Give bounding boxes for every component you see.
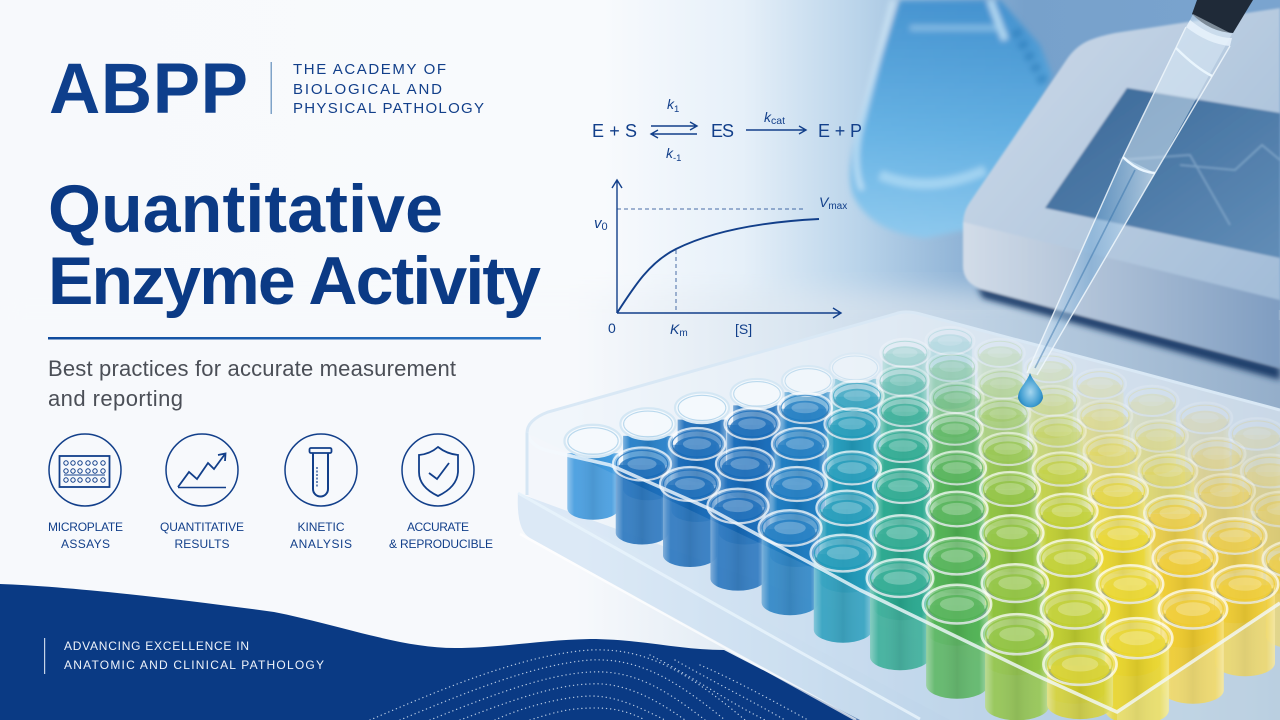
academy name: BIOLOGICAL AND [293,81,442,98]
subtitle [48,356,456,411]
academy name [293,61,484,117]
icon labels: ASSAYS [61,537,110,551]
icon labels: RESULTS [174,537,230,551]
reaction equation: 1 [674,104,679,115]
title: Enzyme Activity [48,243,541,319]
reaction equation [592,96,862,164]
footer tagline: ANATOMIC AND CLINICAL PATHOLOGY [64,658,324,672]
subtitle: and reporting [48,386,183,411]
subtitle: Best practices for accurate measurement [48,356,456,381]
wells [564,327,1280,720]
michaelis-menten chart: m [679,328,688,339]
plate base [518,493,1280,720]
icon labels: QUANTITATIVE [160,520,244,534]
michaelis-menten chart: 0 [602,221,608,233]
michaelis-menten chart: V [819,194,828,210]
icon labels: KINETIC [298,520,345,534]
icon labels: ANALYSIS [290,537,352,551]
michaelis-menten chart: [S] [735,321,752,337]
icon labels: & REPRODUCIBLE [389,537,493,551]
reaction equation: k [667,96,674,112]
academy name: PHYSICAL PATHOLOGY [293,100,484,117]
footer tagline: ADVANCING EXCELLENCE IN [64,639,249,653]
michaelis-menten chart: K [670,321,679,337]
flask [850,0,1052,238]
reaction equation: E + S [592,121,637,141]
reaction equation: k [666,145,673,161]
reaction equation: k [764,109,771,125]
plate top [527,312,1280,712]
academy name: THE ACADEMY OF [293,61,446,78]
michaelis-menten chart [594,180,847,339]
plate front wall [527,433,1117,720]
icon: microplate [49,434,121,506]
icon labels: ACCURATE [407,520,469,534]
icon: rising chart [166,434,238,506]
logo mark: ABPP [49,50,248,129]
instrument [963,8,1280,380]
icon: shield check [402,434,474,506]
dot pattern [370,650,808,720]
wave footer band [0,584,860,720]
michaelis-menten chart: v [594,215,602,232]
michaelis-menten chart: 0 [608,320,616,336]
reaction equation: E + P [818,121,862,141]
logo [49,50,484,129]
michaelis-menten chart: max [828,201,847,212]
microplate [518,312,1280,720]
footer tagline [44,638,324,674]
icon: test tube [285,434,357,506]
icon labels [48,520,493,551]
title: Quantitative [48,171,443,247]
reaction equation: -1 [673,153,681,164]
icon labels: MICROPLATE [48,520,123,534]
droplet [1018,373,1043,407]
reaction equation: ES [711,121,734,141]
pipette [1018,0,1253,407]
reaction equation: cat [771,115,785,127]
icon row [48,434,493,551]
title [48,171,541,319]
